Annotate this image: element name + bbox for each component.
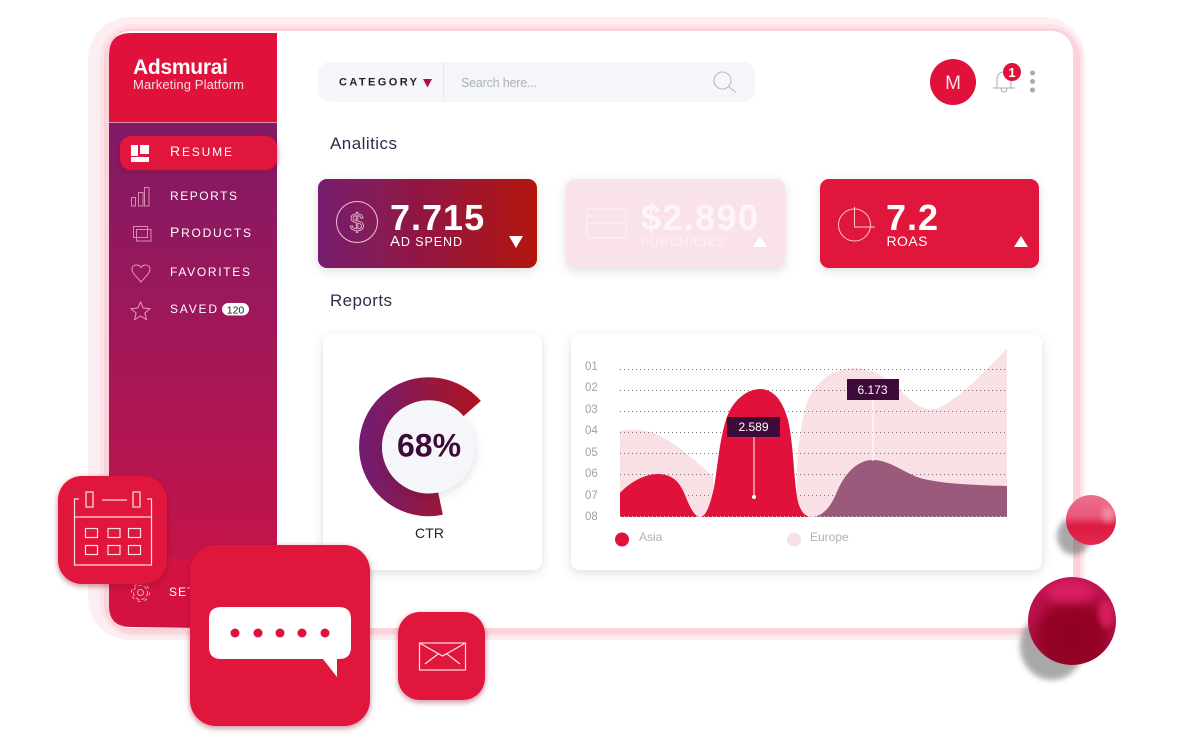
y axis labels: 05 — [585, 447, 598, 459]
card: ad spend: AD SPEND — [390, 233, 462, 250]
y axis labels: 03 — [585, 404, 598, 416]
y axis labels: 08 — [585, 511, 598, 523]
y axis labels: 04 — [585, 425, 598, 437]
card: roas: ROAS — [886, 233, 928, 249]
menu item: resume — [120, 136, 277, 170]
panel: area chart — [571, 334, 1042, 570]
legend — [615, 530, 849, 546]
tooltip: 6.173: 6.173 — [857, 383, 888, 397]
menu item: reports — [132, 188, 237, 206]
menu item: resume: RESUME — [170, 143, 232, 159]
series: overlap — [811, 460, 1007, 517]
label: CTR: CTR — [415, 525, 444, 541]
brand subtitle: Marketing Platform — [133, 77, 244, 92]
series: Asia — [620, 389, 812, 517]
category label: CATEGORY — [339, 76, 418, 88]
panel: sidebar — [109, 33, 277, 629]
sidebar header — [109, 33, 277, 122]
icon tile: calendar — [58, 476, 167, 584]
legend: Asia — [639, 530, 663, 544]
legend: Europe — [810, 530, 849, 544]
brand title: Adsmurai — [133, 56, 228, 79]
tooltip: 6.173 — [847, 379, 899, 461]
y axis labels — [585, 361, 598, 523]
panel: CTR donut — [323, 334, 542, 570]
menu item: settings — [132, 584, 237, 602]
card: ad spend: 7.715 — [390, 197, 485, 238]
icon: dollar: $ — [350, 209, 364, 237]
icon: pie — [838, 207, 875, 241]
donut chart: 68% — [397, 428, 461, 464]
icon: up triangle — [753, 236, 767, 247]
avatar — [930, 59, 976, 105]
icon: magnifier — [714, 72, 736, 92]
panel: main window — [109, 31, 1073, 628]
icon tile: chat — [190, 545, 370, 726]
icon: dropdown arrow — [423, 79, 432, 88]
card: purchases — [566, 179, 785, 268]
series: Europe — [620, 348, 1007, 517]
menu item: reports: REPORTS — [170, 189, 237, 203]
y axis labels: 01 — [585, 361, 598, 373]
icon: credit card — [587, 209, 626, 238]
menu item: products — [134, 224, 251, 241]
donut chart — [371, 389, 475, 505]
icon: up triangle — [1014, 236, 1028, 247]
panel: window halo — [88, 17, 1085, 640]
card: roas — [820, 179, 1039, 268]
decoration: large sphere — [1020, 577, 1116, 680]
icon: notification bell: 1 — [1008, 65, 1016, 80]
badge: 120: 120 — [227, 304, 244, 316]
icon: down triangle — [509, 236, 523, 248]
icon tile: mail — [398, 612, 485, 700]
icon: dollar — [336, 202, 378, 242]
search bar — [318, 62, 755, 102]
menu item: products: PRODUCTS — [170, 224, 251, 240]
heading: analytics: Analitics — [330, 134, 397, 153]
icon: more menu — [1030, 70, 1035, 92]
menu item: favorites — [132, 265, 250, 282]
y axis labels: 06 — [585, 468, 598, 480]
card: purchases: PURCHASES — [641, 235, 725, 249]
menu item: saved: SAVED — [170, 302, 217, 316]
y axis labels: 02 — [585, 382, 598, 394]
tooltip: 2.589 — [727, 417, 780, 499]
card: ad spend — [318, 179, 537, 268]
menu item: settings: SETTINGS — [169, 585, 237, 599]
menu item: saved — [131, 302, 249, 320]
card: roas: 7.2 — [886, 197, 938, 238]
icon: notification bell — [993, 63, 1021, 92]
heading: reports: Reports — [330, 291, 392, 310]
search placeholder: Search here... — [461, 76, 537, 90]
decoration: small sphere — [1057, 495, 1116, 555]
card: purchases: $2.890 — [641, 197, 758, 238]
menu item: favorites: FAVORITES — [170, 265, 250, 279]
y axis labels: 07 — [585, 490, 598, 502]
avatar: M — [945, 73, 961, 94]
tooltip: 2.589: 2.589 — [738, 420, 769, 434]
